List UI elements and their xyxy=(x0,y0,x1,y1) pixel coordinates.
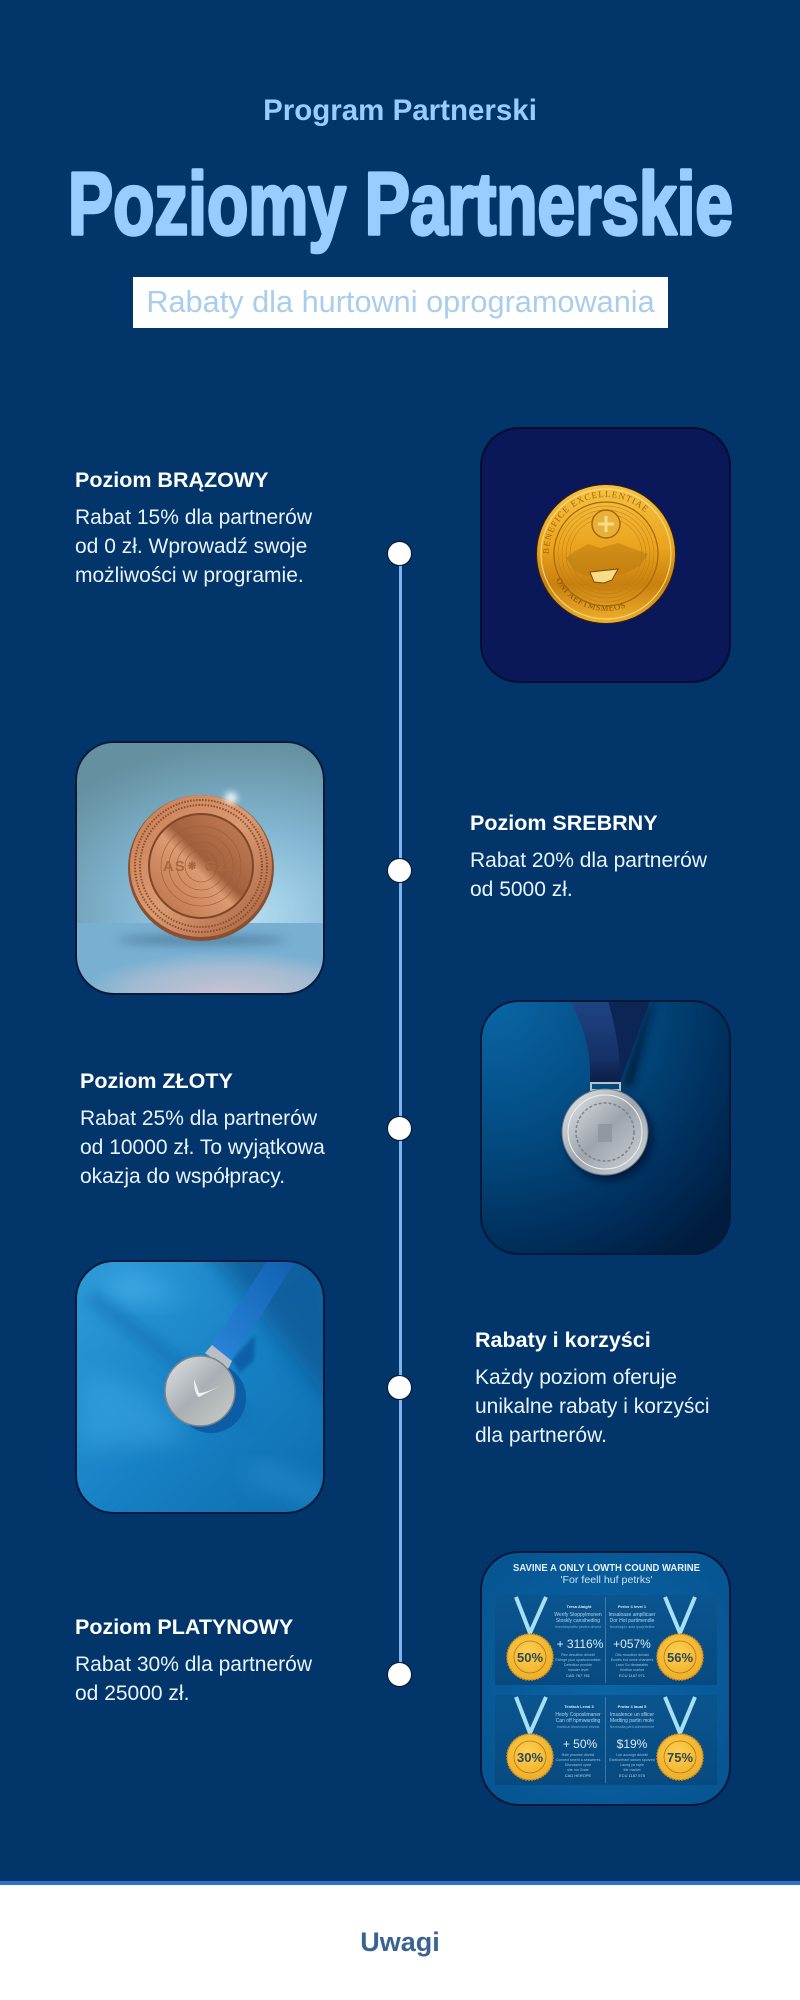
panel: bottom offers: Imsalence un sflicer xyxy=(610,1712,654,1718)
panel: bottom offers: site mo Grate xyxy=(567,1768,589,1772)
panel: bottom offers: CAD HEROPE xyxy=(565,1773,592,1778)
image: gold coin: BENEFICE EXCELLENTIAE xyxy=(543,491,648,554)
subtitle box: Rabaty dla hurtowni oprogramowania xyxy=(146,284,655,319)
timeline dot 2 xyxy=(387,858,412,883)
panel: bottom offers: Lon accroge drivekt xyxy=(616,1753,648,1757)
panel: bottom offers: Medting partin mole xyxy=(610,1718,654,1724)
panel: bottom offers: Imestcal discensive drivekt xyxy=(557,1725,599,1729)
text: Poziom Srebrny: od 5000 zł. xyxy=(470,878,573,901)
image: silver medal with dark ribbon xyxy=(480,1000,731,1255)
panel: bottom offers: 75% xyxy=(667,1750,693,1765)
panel: top offers: ECU 1187 971 xyxy=(619,1673,646,1678)
panel: top offers: Exlinge your opartusnocitser xyxy=(555,1658,601,1662)
panel: top offers: CAD 767 761 xyxy=(566,1673,591,1678)
text: Rabaty i korzyści: Rabaty i korzyści xyxy=(475,1328,651,1352)
image: gold coin: ONI AEFTMSMEOS xyxy=(556,578,625,611)
text: Poziom Platynowy: Rabat 30% dla partnerów xyxy=(75,1653,312,1676)
panel: bottom offers: Laung ya ruple xyxy=(620,1763,644,1767)
image: copper coin xyxy=(75,741,325,995)
eyebrow heading: Program Partnerski xyxy=(263,94,537,127)
panel: top offers: Laon Go denastable xyxy=(616,1663,648,1667)
panel: bottom offers: 30% xyxy=(517,1750,543,1765)
panel: bottom offers: thir market xyxy=(624,1768,640,1772)
panel: top offers: 50% xyxy=(517,1650,543,1665)
panel: top offers: Perlor 4 level 1 xyxy=(618,1604,647,1609)
panel: top offers: Dor Hot partimendle xyxy=(610,1618,655,1624)
panel: bottom offers xyxy=(495,1695,717,1785)
panel: top offers xyxy=(495,1595,717,1685)
panel: top offers: Imsaloase ampllicaer xyxy=(609,1612,656,1618)
text: Poziom Brązowy xyxy=(75,468,312,587)
image: discount medals infographic xyxy=(480,1551,731,1806)
panel: bottom offers: Discussion cycle xyxy=(565,1763,591,1767)
text: Poziom Złoty: od 10000 zł. To wyjątkowa xyxy=(80,1136,325,1159)
panel: bottom offers: $19% xyxy=(617,1737,648,1751)
panel: bottom offers: + 50% xyxy=(563,1737,598,1751)
timeline dot 1 xyxy=(387,541,412,566)
panel: top offers: thirdhar market xyxy=(620,1668,644,1672)
image: copper coin: AS⁕ GZU xyxy=(163,858,239,875)
text: Poziom Platynowy: Poziom PLATYNOWY xyxy=(75,1615,293,1639)
panel: bottom offers: Connect smeht a answerres xyxy=(556,1758,601,1762)
image: gold coin xyxy=(480,427,731,683)
panel: top offers: 56% xyxy=(667,1650,693,1665)
panel: top offers: Detection provide xyxy=(564,1663,592,1667)
footer rule xyxy=(0,1881,800,1885)
panel: bottom offers: Hole procrise drivekt xyxy=(562,1753,594,1757)
panel: top offers: Imestcisprofitz pewira drivekt xyxy=(555,1625,601,1629)
panel: top offers: Rev decultion drivekt xyxy=(561,1653,595,1657)
panel: bottom offers: Can off hpmwarding xyxy=(556,1718,601,1724)
footer label: Uwagi xyxy=(360,1927,440,1957)
text: Poziom Platynowy xyxy=(75,1615,312,1705)
text: Rabaty i korzyści xyxy=(475,1328,710,1447)
text: Poziom Srebrny xyxy=(470,811,708,901)
panel: bottom offers: Necessita parti adresimente xyxy=(610,1725,654,1729)
panel: bottom offers: Exoticerhant sanum spurzed xyxy=(609,1758,655,1762)
panel: top offers: Exotes but nurse chansers xyxy=(611,1658,653,1662)
timeline dot 5 xyxy=(387,1662,412,1687)
panel: top offers: Necessiplo asta iprajetlefina xyxy=(610,1625,654,1629)
timeline dot 4 xyxy=(387,1375,412,1400)
text: Poziom Brązowy: Poziom BRĄZOWY xyxy=(75,468,268,492)
panel: top offers: + 3116% xyxy=(557,1637,604,1651)
panel: top offers: +057% xyxy=(613,1637,651,1651)
panel: top offers: Stoskly cansiheding xyxy=(556,1618,600,1624)
text: Poziom Złoty xyxy=(80,1069,325,1188)
footer xyxy=(0,1885,800,2000)
panel: top offers: Werify Stoppylmonen xyxy=(554,1612,602,1618)
image: discount medals infographic: 'For feell huf petrks' xyxy=(560,1574,652,1586)
text: Poziom Złoty: okazja do współpracy. xyxy=(80,1165,285,1188)
text: Poziom Platynowy: od 25000 zł. xyxy=(75,1682,189,1705)
text: Rabaty i korzyści: unikalne rabaty i korzyści xyxy=(475,1395,710,1418)
text: Poziom Srebrny: Poziom SREBRNY xyxy=(470,811,658,835)
panel: top offers: mander level xyxy=(568,1668,588,1672)
text: Poziom Brązowy: Rabat 15% dla partnerów xyxy=(75,506,312,529)
text: Poziom Złoty: Rabat 25% dla partnerów xyxy=(80,1107,317,1130)
text: Poziom Srebrny: Rabat 20% dla partnerów xyxy=(470,849,707,872)
subtitle box xyxy=(133,277,668,328)
panel: top offers: Ofic mocotion dovakt xyxy=(615,1653,649,1657)
image: discount medals infographic: SAVINE A ONLY LOWTH COUND WARINE xyxy=(513,1562,700,1574)
panel: bottom offers: ECU 1187 575 xyxy=(619,1773,646,1778)
panel: bottom offers: Protar 4 laual 5 xyxy=(618,1704,647,1709)
timeline line xyxy=(398,554,402,1675)
text: Rabaty i korzyści: dla partnerów. xyxy=(475,1424,607,1447)
text: Poziom Brązowy: możliwości w programie. xyxy=(75,564,304,587)
text: Poziom Złoty: Poziom ZŁOTY xyxy=(80,1069,233,1093)
timeline dot 3 xyxy=(387,1116,412,1141)
panel: bottom offers: Tenfack Leval 3 xyxy=(564,1704,595,1709)
text: Poziom Brązowy: od 0 zł. Wprowadź swoje xyxy=(75,535,307,558)
panel: top offers: Tersa Alaight xyxy=(567,1604,592,1609)
text: Rabaty i korzyści: Każdy poziom oferuje xyxy=(475,1366,677,1389)
image: silver medal on blue xyxy=(75,1260,325,1514)
panel: bottom offers: Heofy Coposlimaner xyxy=(555,1712,601,1718)
